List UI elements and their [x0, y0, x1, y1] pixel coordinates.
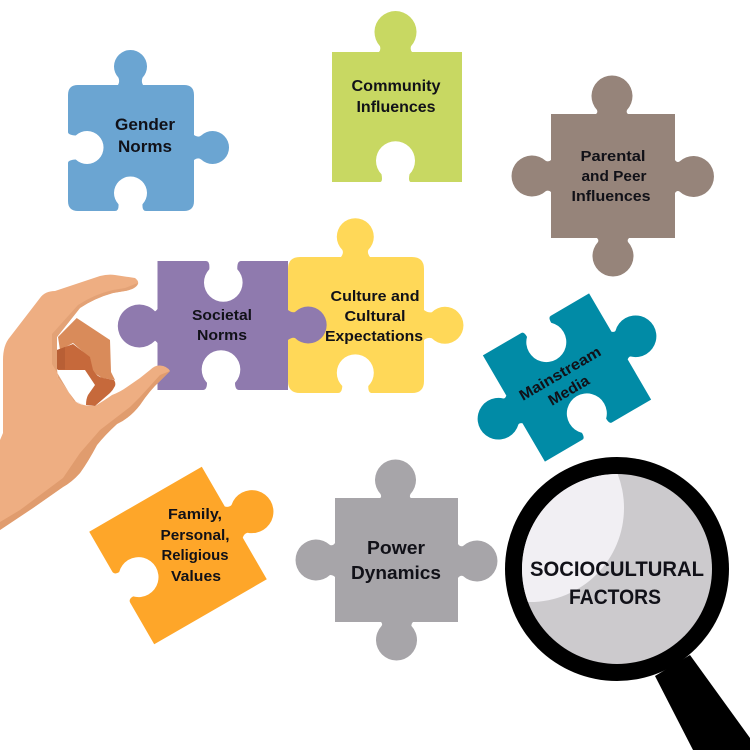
- label: culture and cultural expectations: Culture and: [330, 288, 420, 305]
- magnifier handle: [655, 655, 750, 750]
- panel: family, personal, religious values puzzle piece: [89, 445, 304, 644]
- label: gender norms: Gender: [115, 115, 175, 134]
- label: family, personal, religious values: Family,: [168, 506, 222, 523]
- green puzzle shape: [332, 11, 462, 182]
- lens highlight: [522, 474, 624, 602]
- icon: magnifying glass: [505, 457, 750, 750]
- title: sociocultural factors: SOCIOCULTURAL: [530, 557, 704, 581]
- panel: societal norms puzzle piece: [118, 261, 327, 390]
- label: community influences: Influences: [356, 99, 436, 116]
- grey puzzle shape: [296, 460, 497, 660]
- label: mainstream media: Mainstream: [516, 343, 604, 404]
- magnifier rim: [505, 457, 729, 681]
- label: gender norms: [115, 115, 175, 156]
- panel: gender norms puzzle piece: [68, 50, 229, 211]
- panel: mainstream media puzzle piece: [449, 274, 685, 481]
- label: community influences: Community: [352, 78, 441, 95]
- label: mainstream media: Media: [545, 372, 593, 410]
- title: sociocultural factors: [530, 557, 704, 609]
- icon: hand holding puzzle piece: [0, 275, 170, 530]
- teal puzzle shape: [449, 274, 685, 481]
- thumb and wrist shadow: [0, 371, 170, 530]
- panel: community influences puzzle piece: [332, 11, 462, 182]
- label: family, personal, religious values: Values: [171, 568, 221, 585]
- palm and thumb: [0, 275, 170, 530]
- label: power dynamics: [351, 537, 441, 583]
- inner finger darkest: [57, 347, 65, 370]
- label: family, personal, religious values: Personal,: [160, 527, 230, 544]
- label: power dynamics: Dynamics: [351, 562, 441, 583]
- label: societal norms: Norms: [197, 327, 247, 344]
- orange puzzle shape: [89, 445, 304, 644]
- panel: parental and peer influences puzzle piece: [512, 76, 714, 276]
- brown puzzle shape: [512, 76, 714, 276]
- label: family, personal, religious values: [160, 506, 230, 585]
- label: parental and peer influences: Parental: [580, 148, 646, 165]
- label: parental and peer influences: Influences: [572, 188, 650, 205]
- label: community influences: [352, 78, 441, 116]
- blue puzzle shape: [68, 50, 229, 211]
- title: sociocultural factors: FACTORS: [569, 585, 661, 609]
- magnifier lens: [522, 474, 712, 664]
- inner finger light: [58, 318, 115, 380]
- label: societal norms: Societal: [192, 307, 252, 324]
- label: culture and cultural expectations: Expectations: [325, 328, 423, 345]
- label: family, personal, religious values: Religious: [162, 547, 228, 564]
- yellow puzzle shape: [288, 218, 463, 393]
- purple puzzle shape: [118, 261, 327, 390]
- label: gender norms: Norms: [118, 137, 172, 156]
- label: societal norms: [192, 307, 252, 344]
- panel: power dynamics puzzle piece: [296, 460, 497, 660]
- label: culture and cultural expectations: [325, 288, 423, 345]
- label: mainstream media: [516, 343, 614, 421]
- panel: culture and cultural expectations puzzle piece: [288, 218, 463, 393]
- index finger and palm hollow shadow: [52, 283, 138, 406]
- inner finger dark: [57, 344, 115, 406]
- label: power dynamics: Power: [367, 537, 425, 558]
- label: culture and cultural expectations: Cultural: [344, 308, 406, 325]
- label: parental and peer influences: and Peer: [582, 168, 647, 185]
- label: parental and peer influences: [572, 148, 650, 205]
